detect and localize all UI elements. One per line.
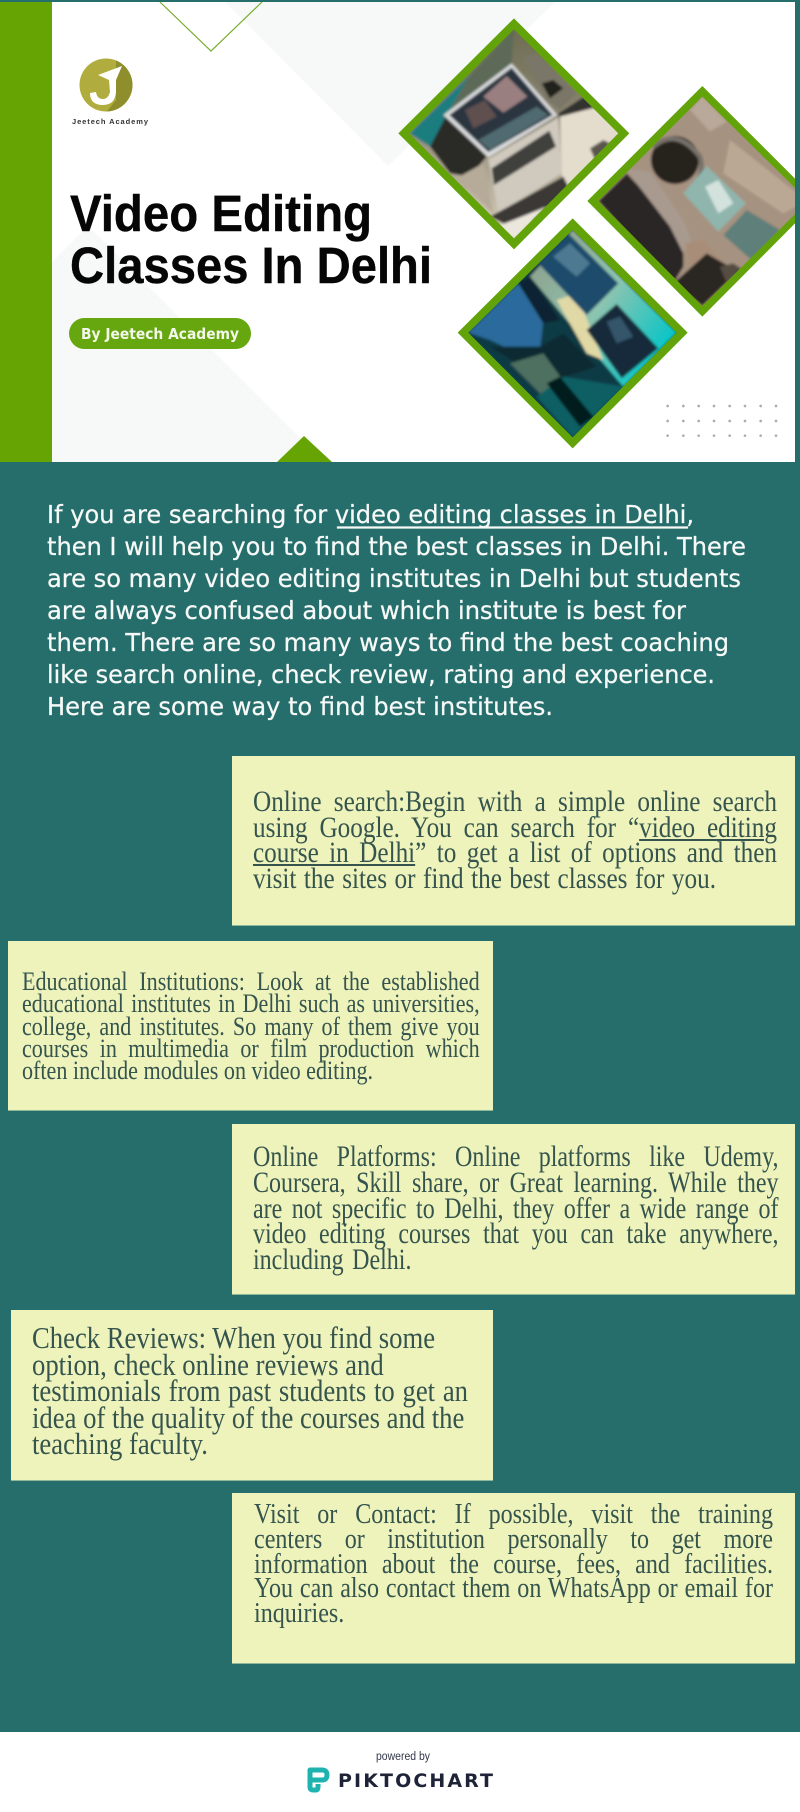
photo collage (398, 18, 800, 448)
background gray diamond lower left (52, 226, 324, 462)
dot grid (666, 405, 777, 437)
piktochart icon (310, 1770, 327, 1790)
piktochart wordmark: PIKTOCHART (338, 1770, 493, 1792)
card: online search: visit the sites or find the best classes for you. (252, 862, 715, 895)
photo: editor with headphones (587, 86, 800, 317)
card: online search: Online search:Begin with a simple online search (252, 785, 776, 818)
card: online platforms: including Delhi. (252, 1243, 411, 1276)
background gray diamond top (225, 2, 555, 166)
card: visit or contact: Visit or Contact: If possible, visit the training (254, 1499, 773, 1530)
card: visit or contact: centers or institution personally to get more (254, 1524, 773, 1555)
intro paragraph: are so many video editing institutes in Delhi but students (47, 564, 741, 593)
intro paragraph: like search online, check review, rating and experience. (47, 660, 715, 689)
header white background (52, 2, 795, 462)
card: check reviews: Check Reviews: When you find some (32, 1320, 435, 1355)
photo: laptop with video editor (398, 18, 629, 249)
header banner (0, 2, 795, 462)
logo: Jeetech Academy (72, 117, 149, 126)
intro paragraph: are always confused about which institute is best for (47, 596, 687, 625)
card: online platforms: are not specific to Delhi, they offer a wide range of (252, 1192, 778, 1224)
intro paragraph: Here are some way to find best institutes. (47, 692, 553, 721)
card: visit or contact: inquiries. (254, 1598, 344, 1629)
card: educational institutions: often include modules on video editing. (22, 1056, 373, 1085)
card: educational institutions: college, and institutes. So many of them give you (22, 1012, 480, 1041)
card: visit or contact: You can also contact them on WhatsApp or email for (254, 1573, 773, 1604)
card: online platforms: video editing courses that you can take anywhere, (252, 1217, 778, 1250)
intro paragraph (47, 500, 746, 721)
intro paragraph: then I will help you to find the best classes in Delhi. There (47, 532, 746, 561)
footer (0, 1732, 800, 1812)
card: educational institutions: educational institutes in Delhi such as universities, (22, 989, 480, 1018)
byline pill: By Jeetech Academy (81, 325, 239, 343)
intro paragraph: them. There are so many ways to find the best coaching (47, 628, 729, 657)
card: online search: course in Delhi” to get a list of options and then (252, 836, 776, 869)
card: educational institutions (8, 941, 493, 1111)
byline pill (69, 318, 251, 349)
card: educational institutions: Educational Institutions: Look at the established (22, 967, 480, 996)
card: check reviews: teaching faculty. (32, 1426, 208, 1461)
green outline triangle (160, 2, 262, 51)
card: check reviews (11, 1310, 493, 1481)
card: online platforms: Online Platforms: Online platforms like Udemy, (252, 1140, 778, 1173)
powered by label: powered by (376, 1751, 430, 1763)
intro paragraph: If you are searching for video editing classes in Delhi, (47, 500, 694, 529)
card: online platforms (232, 1124, 795, 1295)
card: online platforms: Coursera, Skill share, or Great learning. While they (252, 1166, 778, 1199)
card: visit or contact: information about the course, fees, and facilities. (254, 1549, 773, 1580)
title: Classes In Delhi (70, 237, 432, 294)
photo: colour grading desk (458, 218, 688, 448)
logo (72, 55, 149, 126)
card: check reviews: testimonials from past students to get an (32, 1373, 468, 1408)
title (70, 185, 432, 294)
card: online search (232, 756, 795, 926)
green sidebar (0, 2, 52, 462)
card: check reviews: idea of the quality of the courses and the (32, 1400, 464, 1435)
title: Video Editing (70, 185, 372, 242)
card: online search: using Google. You can search for “video editing (252, 811, 776, 844)
card: check reviews: option, check online reviews and (32, 1347, 384, 1382)
card: visit or contact (232, 1493, 795, 1664)
card: educational institutions: courses in multimedia or film production which (22, 1034, 480, 1063)
green bottom triangle (277, 436, 332, 462)
